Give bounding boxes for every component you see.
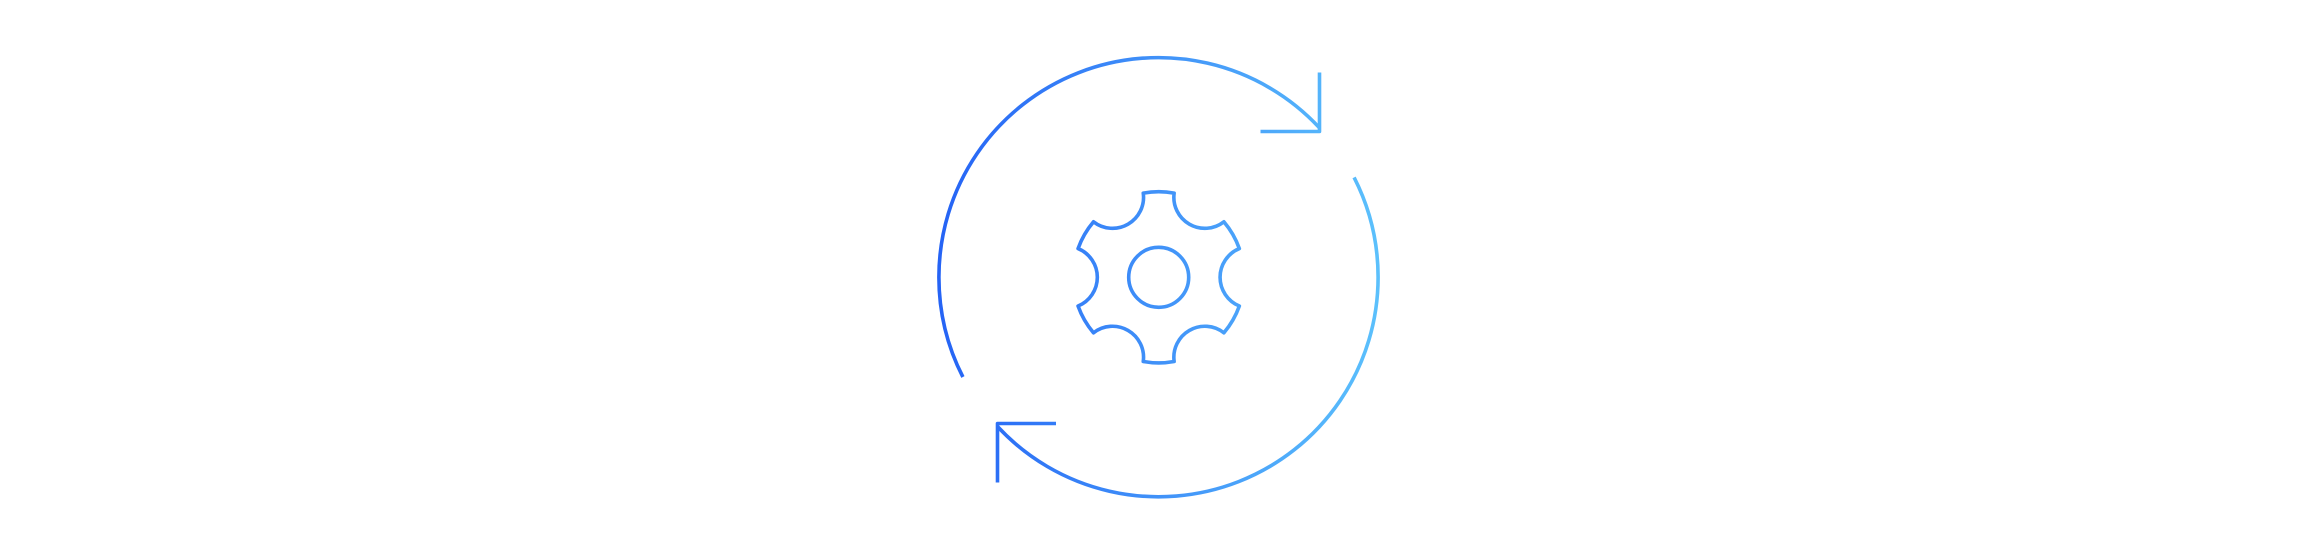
arrow: bottom clockwise arc (997, 177, 1378, 497)
gear centre ring (1129, 247, 1189, 307)
gear outline (1078, 192, 1239, 363)
icon: gear (1078, 192, 1239, 363)
panel: cycle icon (939, 58, 1378, 497)
arrow: top clockwise arc (939, 58, 1320, 377)
